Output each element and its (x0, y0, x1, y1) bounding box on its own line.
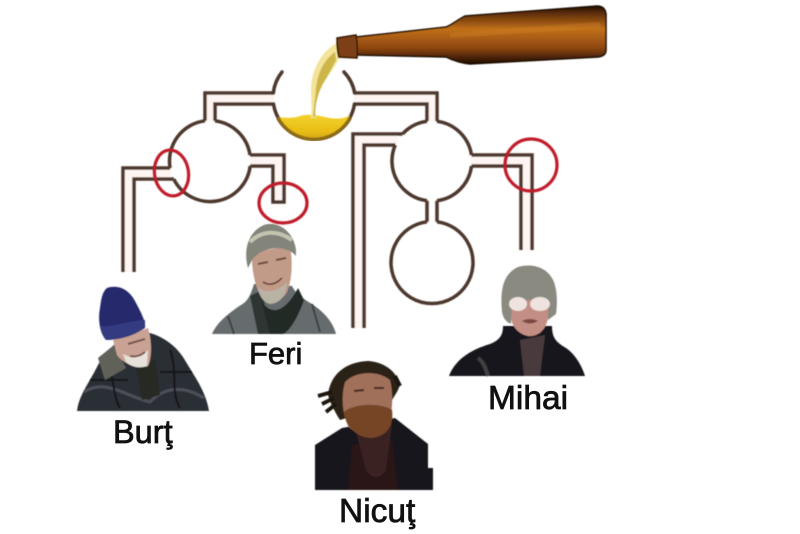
coat (212, 284, 336, 334)
person: Mihai (449, 266, 585, 417)
face (252, 246, 292, 301)
pipe: top to left flask (205, 93, 274, 121)
flask: right (392, 121, 472, 201)
beer in flask (278, 115, 350, 139)
flask: lower dead end (391, 222, 473, 303)
pipe: top to right flask (354, 93, 437, 121)
beer stream (311, 42, 339, 118)
hair (328, 361, 400, 420)
pipe network (123, 72, 532, 328)
coat (315, 418, 433, 490)
beard (344, 405, 392, 438)
name: Feri: Feri (249, 336, 302, 371)
red circle markers (151, 139, 557, 223)
neck (355, 424, 392, 477)
marker: Feri blocked pipe (259, 183, 307, 223)
name: Mihai: Mihai (488, 380, 568, 417)
flask: left (169, 121, 250, 202)
marker: Mihai joint (505, 139, 557, 191)
glasses (509, 297, 527, 311)
pipe: to Nicut (353, 134, 402, 328)
person: Burt (77, 287, 209, 450)
pipe: blocked, to Feri (250, 155, 284, 202)
hat (246, 224, 296, 268)
face (343, 373, 392, 435)
coat (77, 333, 209, 411)
hat (99, 287, 145, 340)
coat (449, 326, 585, 376)
pipe interior tint (128, 98, 526, 328)
name: Nicut: Nicuţ (339, 493, 416, 530)
pipe: to Burt (123, 168, 174, 272)
flask: top receiver (273, 72, 355, 139)
face (510, 296, 548, 336)
hat (501, 266, 557, 324)
marker: Burt joint (151, 148, 192, 198)
name: Burt: Burţ (113, 414, 173, 450)
person: Nicut (315, 361, 433, 530)
pipe: to Mihai (472, 155, 532, 250)
beer bottle (337, 6, 606, 64)
pipe: right flask to lower flask (427, 201, 437, 222)
face (113, 328, 151, 367)
person: Feri (212, 224, 336, 371)
